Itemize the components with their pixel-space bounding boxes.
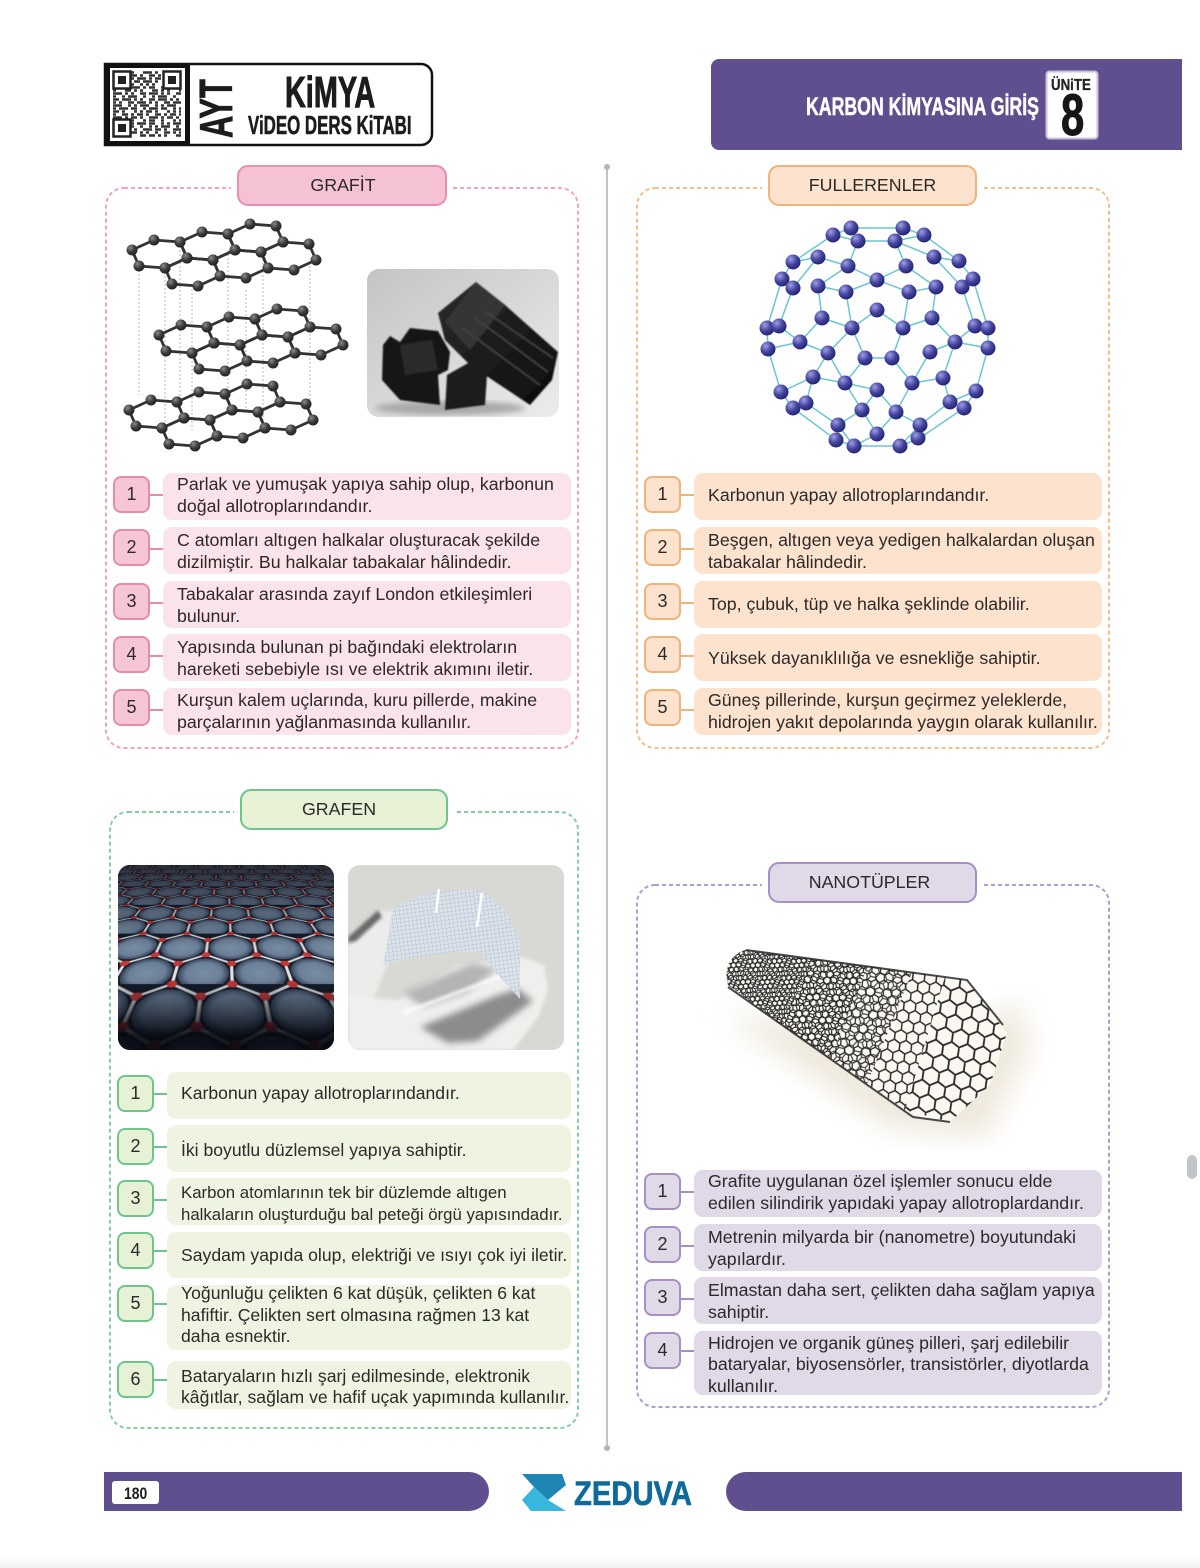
panel: grafen: daha esnektir. [181,1326,291,1346]
item 3 [113,581,571,628]
panel: fullerenler [636,165,1110,749]
panel: nanotüpler: 2 [657,1234,668,1254]
QR code [113,72,181,136]
panel: grafit: C atomları altıgen halkalar oluşturacak şekilde [177,530,540,550]
panel: fullerenler: 5 [657,697,668,717]
item 2 [117,1125,571,1172]
diagram: graphite layers [124,218,348,452]
panel: fullerenler: 1 [657,484,668,504]
heading: nanotüpler [768,862,977,903]
panel: fullerenler: 3 [657,591,668,611]
item 4 [644,634,1102,681]
item 3 [117,1178,571,1225]
panel: grafen: 2 [130,1136,140,1156]
tube shadow [722,1000,1030,1138]
panel: grafen: 4 [130,1240,140,1260]
diagram: carbon nanotube [726,949,1037,1146]
center divider [604,164,610,1451]
panel: fullerenler: Güneş pillerinde, kurşun geçirmez yeleklerde, [708,690,1067,710]
photo: flexible graphene sheet in gloved hand [348,865,564,1050]
unit banner: KARBON KİMYASINA GİRİŞ [806,92,1039,121]
heading: grafit: GRAFİT [310,175,376,195]
unit banner: 8 [1061,82,1084,148]
panel: nanotüpler: Elmastan daha sert, çelikten daha sağlam yapıya [708,1280,1095,1300]
panel: nanotüpler: yapılardır. [708,1248,786,1268]
panel: nanotüpler: 3 [657,1287,668,1307]
scrollbar thumb [1187,1155,1197,1179]
panel: grafit: bulunur. [177,606,240,626]
panel: grafit: dizilmiştir. Bu halkalar tabakalar hâlindedir. [177,552,511,572]
panel: fullerenler: hidrojen yakıt depolarında yaygın olarak kullanılır. [708,712,1098,732]
panel: nanotüpler: 4 [657,1340,668,1360]
panel: grafit [105,165,579,749]
item 5 [113,688,571,735]
panel: grafit: hareketi sebebiyle ısı ve elektrik akımını iletir. [177,658,533,678]
panel: grafen: Yoğunluğu çelikten 6 kat düşük, çelikten 6 kat [181,1283,535,1303]
panel: grafen: Bataryaların hızlı şarj edilmesinde, elektronik [181,1366,530,1386]
panel: fullerenler: Top, çubuk, tüp ve halka şeklinde olabilir. [708,594,1030,614]
photo: graphite rock [367,269,559,417]
item 6 [117,1361,571,1409]
photo: graphene lattice [118,865,334,1050]
item 4 [644,1331,1102,1396]
heading: fullerenler [768,165,977,206]
heading: grafen: GRAFEN [302,799,376,819]
panel: grafen: İki boyutlu düzlemsel yapıya sahiptir. [181,1140,467,1160]
panel: grafit: Tabakalar arasında zayıf London etkileşimleri [177,584,532,604]
header badge: QR code and book title: KiMYA [285,67,375,116]
heading: nanotüpler: NANOTÜPLER [809,872,930,892]
item 1 [644,1170,1102,1217]
item 1 [644,473,1102,520]
panel: grafen: 6 [130,1369,140,1389]
tube body [726,950,1007,1122]
panel: nanotüpler: 1 [657,1181,668,1201]
logo: Zeduva: ZEDUVA [574,1474,692,1513]
panel: grafen: 5 [130,1293,140,1313]
panel: nanotüpler: Hidrojen ve organik güneş pilleri, şarj edilebilir [708,1333,1069,1353]
panel: grafen [109,789,988,1429]
panel: nanotüpler: Metrenin milyarda bir (nanometre) boyutundaki [708,1227,1076,1247]
heading: grafen [240,789,448,830]
item 4 [113,634,571,681]
panel: grafit: 1 [126,484,136,504]
panel: grafit: Kurşun kalem uçlarında, kuru pillerde, makine [177,690,537,710]
header badge: QR code and book title [104,62,434,146]
item 2 [644,1224,1102,1271]
panel: grafen: kâğıtlar, sağlam ve hafif uçak yapımında kullanılır. [181,1387,569,1407]
panel: grafen: halkaların oluşturduğu bal peteği örgü yapısındadır. [181,1204,563,1224]
item 1 [117,1072,571,1119]
item 3 [644,581,1102,628]
item 5 [644,688,1102,735]
panel: nanotüpler: kullanılır. [708,1376,778,1396]
panel: fullerenler: Karbonun yapay allotroplarındandır. [708,485,989,505]
panel: nanotüpler: sahiptir. [708,1302,769,1322]
panel: grafen: 1 [130,1083,140,1103]
item 5 [117,1283,571,1350]
panel: grafen: hafiftir. Çelikten sert olmasına rağmen 13 kat [181,1305,529,1325]
item 3 [644,1277,1102,1324]
logo: Zeduva [522,1474,692,1513]
panel: grafen: Saydam yapıda olup, elektriği ve ısıyı çok iyi iletir. [181,1245,567,1265]
item 2 [113,527,571,574]
panel: fullerenler: Beşgen, altıgen veya yedigen halkalardan oluşan [708,530,1095,550]
panel: grafen: Karbon atomlarının tek bir düzlemde altıgen [181,1183,507,1202]
unit banner [711,59,1182,150]
panel: grafit: doğal allotroplarındandır. [177,496,372,516]
page edge shading [0,1556,1200,1568]
panel: fullerenler: 2 [657,537,668,557]
panel: fullerenler: tabakalar hâlindedir. [708,552,867,572]
footer bar with page number [104,1472,489,1511]
diagram: fullerene sphere [760,220,996,454]
panel: nanotüpler: bataryalar, biyosensörler, transistörler, diyotlarda [708,1354,1089,1374]
header badge: QR code and book title: ViDEO DERS KiTABI [248,110,412,140]
panel: grafen: 3 [130,1188,140,1208]
panel: grafit: 5 [126,697,136,717]
panel: grafen: Karbonun yapay allotroplarındandır. [181,1083,460,1103]
panel: fullerenler: 4 [657,644,668,664]
panel: nanotüpler: Grafite uygulanan özel işlemler sonucu elde [708,1171,1052,1191]
panel: fullerenler: Yüksek dayanıklılığa ve esnekliğe sahiptir. [708,648,1041,668]
item 4 [117,1232,571,1278]
panel: grafit: parçalarının yağlanmasında kullanılır. [177,712,471,732]
item 2 [644,527,1102,574]
panel: nanotüpler [117,862,1110,1504]
heading: grafit [237,165,447,206]
footer bar with page number: 180 [124,1485,147,1503]
panel: grafit: 2 [126,537,136,557]
panel: grafit: Parlak ve yumuşak yapıya sahip olup, karbonun [177,474,554,494]
panel: grafit: Yapısında bulunan pi bağındaki elektroların [177,637,517,657]
heading: fullerenler: FULLERENLER [809,175,936,195]
panel: nanotüpler: edilen silindirik yapıdaki yapay allotroplardandır. [708,1192,1084,1212]
panel: grafit: 4 [126,644,136,664]
title text: AYT [192,79,243,138]
item 1 [113,473,571,520]
panel: grafit: 3 [126,591,136,611]
footer bar right [726,1472,1182,1511]
unit banner: ÜNiTE [1051,76,1091,94]
